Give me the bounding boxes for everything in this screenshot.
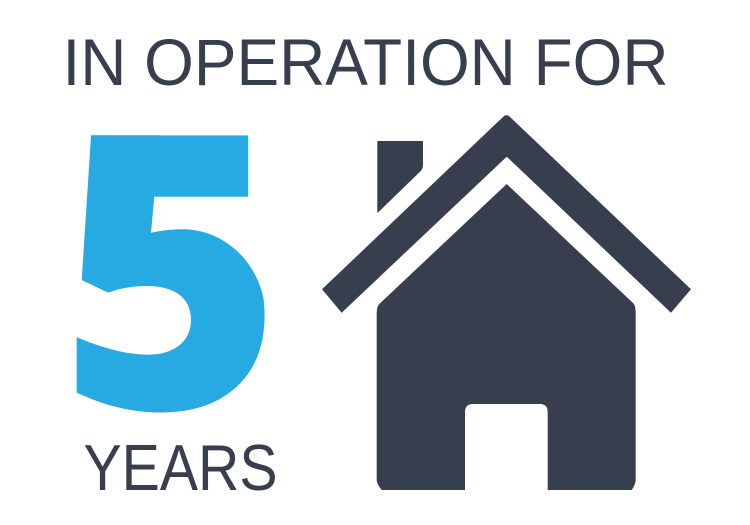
chimney [377,141,423,213]
title: IN OPERATION FOR [62,25,668,99]
years label: YEARS [84,431,278,504]
house body with door [377,184,636,490]
infographic [68,39,691,490]
roof [322,115,691,313]
big number 5: 5 [61,76,278,480]
big number 5 [76,135,265,412]
icon: house [322,115,691,490]
